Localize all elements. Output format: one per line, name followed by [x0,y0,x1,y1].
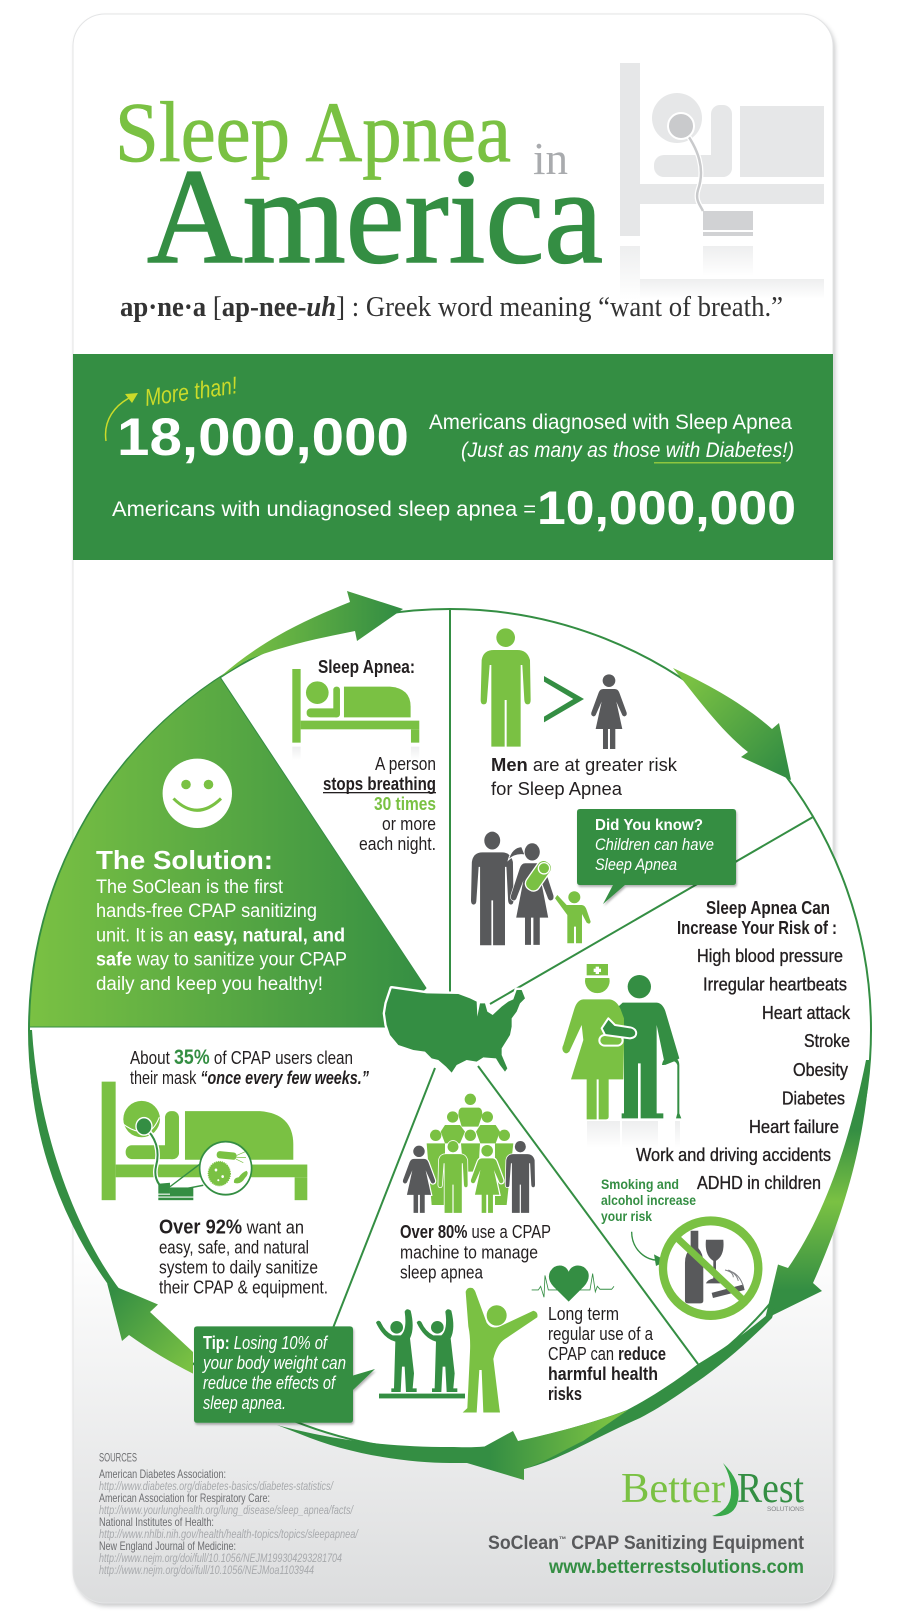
text: clean mask [130,1046,369,1088]
title [115,84,603,292]
text: men: Men are at greater risk [491,755,678,775]
text: product name and website: SoClean [488,1533,564,1554]
segment: the solution wedge [30,677,426,1027]
text: stops breathing [318,657,436,854]
text: stops breathing: Sleep Apnea: [318,657,415,677]
text block: sources: http://www.nhlbi.nih.gov/health/health-topics/topics/sleepapnea/ [99,1527,359,1541]
text: increased risk list: Diabetes [782,1088,845,1108]
text: over 92% want: system to daily sanitize [159,1258,318,1278]
text: the solution: The SoClean is the first [96,877,284,898]
callout: tip: reduce the effects of [203,1373,337,1393]
callout: did you know: Sleep Apnea [595,856,677,874]
callout: tip: sleep apnea. [203,1393,286,1413]
title: in [533,133,568,184]
text: stops breathing: 30 times [374,794,436,814]
icon: heart with ekg [532,1265,614,1302]
statistic: 10 million undiagnosed [112,481,796,534]
arrow: left tapering tail [29,1030,120,1290]
text: clean mask: their mask “once every few weeks.” [130,1068,369,1088]
text: increased risk list [636,898,851,1193]
logo: BetterRest Solutions: Better [621,1466,725,1512]
dark figures [376,1309,457,1392]
text: increased risk list: Increase Your Risk of : [677,918,837,938]
icon: crowd of people [403,1094,535,1213]
text: product name and website: www.betterrestsolutions.com [548,1557,804,1578]
text: stops breathing: each night. [359,834,436,854]
text: increased risk list: High blood pressure [697,946,843,966]
text: long term use: risks [548,1384,582,1404]
statistic description: (Just as many as those with Diabetes!) [461,439,794,462]
more than note: More than! [143,372,239,412]
text: men: for Sleep Apnea [491,779,623,799]
text: over 80% use CPAP: machine to manage [400,1242,538,1262]
text block: sources: American Diabetes Association: [99,1467,226,1481]
text: over 80% use CPAP: Over 80% use a CPAP [400,1222,551,1242]
icon: smiley [163,759,232,828]
text: the solution: unit. It is an easy, natural, and [96,926,345,946]
statistic: 10 million undiagnosed: Americans with undiagnosed sleep apnea = [112,498,536,521]
text: over 92% want [159,1217,328,1298]
text block: sources: http://www.diabetes.org/diabetes-basics/diabetes-statistics/ [99,1479,334,1493]
text: stops breathing: stops breathing [323,774,436,794]
title: America [147,142,603,292]
text: long term use: regular use of a [548,1324,654,1344]
statistic description: Americans diagnosed with Sleep Apnea [429,411,792,434]
icon: no smoking and alcohol [632,1221,758,1315]
icon: family [471,832,591,945]
arrow: lower left [107,1283,193,1374]
text: over 80% use CPAP [400,1222,551,1282]
logo: BetterRest Solutions: SOLUTIONS [767,1506,805,1513]
panel: statistics band [73,354,833,560]
text block: sources: American Association for Respiratory Care: [99,1491,270,1505]
text block: sources: http://www.nejm.org/doi/full/10.1056/NEJM199304293281704 [99,1551,342,1565]
icon: gray sleeper with CPAP bed [620,63,824,300]
callout: did you know: Did You know? [595,817,703,834]
statistic description [429,411,794,464]
text: long term use [548,1304,666,1404]
callout: tip [194,1326,375,1423]
text: increased risk list: ADHD in children [697,1173,821,1193]
text: the solution: hands-free CPAP sanitizing [96,901,317,922]
text: stops breathing: A person [375,754,436,774]
icon: man greater than woman [481,628,627,749]
text: product name and website: CPAP Sanitizing Equipment [566,1533,805,1554]
text block: sources [99,1451,359,1577]
text block: sources: New England Journal of Medicine: [99,1539,236,1553]
text block: sources: http://www.yourlunghealth.org/lung_disease/sleep_apnea/facts/ [99,1503,354,1517]
note: smoking and alcohol: your risk [601,1209,652,1224]
nurse reflection [587,1121,680,1148]
text block: sources: http://www.nejm.org/doi/full/10.1056/NEJMoa1103944 [99,1563,314,1577]
more than note [106,372,239,441]
text: the solution: daily and keep you healthy! [96,974,323,995]
text: clean mask: About 35% of CPAP users clean [130,1046,353,1069]
note: smoking and alcohol: Smoking and [601,1177,679,1192]
text: over 92% want: their CPAP & equipment. [159,1278,328,1298]
text: men [491,755,678,799]
title: Sleep Apnea [115,84,511,180]
callout: did you know: Children can have [595,836,714,854]
text block: sources: National Institutes of Health: [99,1515,214,1529]
arrow: bottom head [467,1410,628,1480]
panel: sleep apnea breathing fact [292,657,436,854]
callout: did you know [577,809,736,904]
statistic: 18 million: 18,000,000 [117,408,409,467]
text: the solution [96,845,347,995]
text: the solution: safe way to sanitize your CPAP [96,950,347,970]
icon: CPAP bed with germs [102,1082,307,1200]
text: product name and website [488,1533,805,1578]
segment divider lines [333,609,813,1364]
text: the solution: The Solution: [96,845,273,875]
icon: nurse and patient [562,964,681,1119]
arrow: bottom band [277,1308,775,1469]
arrow: lower right [765,1060,870,1319]
arrow: upper right [673,668,791,780]
arrow: top [220,591,403,677]
text: long term use: CPAP can reduce [548,1344,666,1364]
icon: sleeper in bed [292,669,419,760]
text: over 92% want: Over 92% want an [159,1217,304,1239]
text: increased risk list: Obesity [793,1060,848,1080]
text: increased risk list: Sleep Apnea Can [706,898,830,918]
icon: USA map [385,988,525,1073]
callout: tip: your body weight can [201,1353,346,1373]
text: increased risk list: Work and driving accidents [636,1145,831,1165]
text: product name and website: ™ [559,1535,566,1544]
circle outline [29,609,871,1451]
note: smoking and alcohol [601,1177,696,1224]
text: increased risk list: Irregular heartbeats [703,975,847,995]
large light figure [463,1288,537,1413]
definition line: ap·ne·a [ap-nee-uh] : Greek word meaning “want of breath.” [120,292,783,323]
logo: BetterRest Solutions [621,1463,805,1516]
text: long term use: Long term [548,1304,619,1324]
text: increased risk list: Heart failure [749,1117,839,1137]
text: stops breathing: or more [382,814,436,834]
note: smoking and alcohol: alcohol increase [601,1193,696,1208]
text: over 92% want: easy, safe, and natural [159,1238,309,1258]
text block: sources: SOURCES [99,1451,137,1465]
text: over 80% use CPAP: sleep apnea [400,1262,484,1282]
text: long term use: harmful health [548,1364,658,1384]
callout: tip: Tip: Losing 10% of [203,1333,329,1353]
panel: men at greater risk [481,628,678,799]
logo: BetterRest Solutions: Rest [737,1466,804,1512]
icon: cheering figures [376,1288,537,1413]
statistic: 10 million undiagnosed: 10,000,000 [537,481,796,534]
text: increased risk list: Heart attack [762,1003,851,1023]
text: increased risk list: Stroke [804,1031,850,1051]
